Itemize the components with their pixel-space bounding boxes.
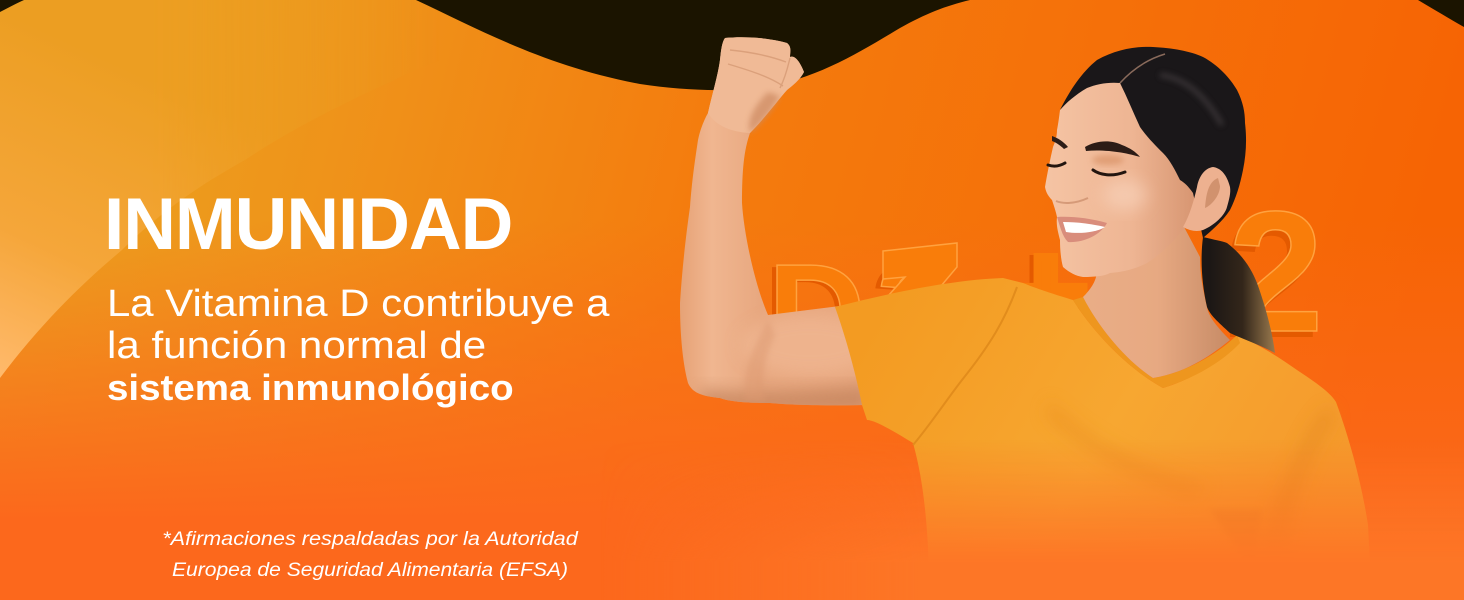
label faces: + (1002, 209, 1090, 377)
footnote: Europea de Seguridad Alimentaria (EFSA) (172, 559, 568, 581)
nose shadow (1056, 198, 1088, 203)
body text: la función normal de (107, 325, 486, 367)
footnote: *Afirmaciones respaldadas por la Autoridad (162, 528, 578, 550)
raised arm and fist (680, 37, 862, 406)
label faces: 3 (877, 238, 947, 377)
label faces (768, 176, 1324, 387)
label extrusion (763, 182, 1320, 389)
wave: dark top right corner (1418, 0, 1464, 27)
ear inner shadow (1205, 178, 1220, 208)
shirt collar (1073, 297, 1240, 388)
eyeshadow (1092, 155, 1124, 165)
fade at shirt bottom (786, 460, 1464, 600)
lips (1057, 217, 1107, 242)
body text: sistema inmunológico (107, 367, 514, 408)
footnote (162, 528, 578, 581)
heading: INMUNIDAD (104, 184, 512, 265)
face highlights (1103, 179, 1147, 211)
eyebrows (1052, 136, 1140, 157)
wave: dark top (416, 0, 970, 90)
shirt folds (1045, 400, 1210, 500)
ear (1183, 167, 1230, 231)
shirt sleeve seam (913, 287, 1017, 445)
hair parting (1120, 54, 1165, 83)
wave: dark top left corner (0, 0, 24, 12)
body text: La Vitamina D contribuye a (107, 283, 609, 325)
label faces: D (768, 236, 866, 387)
hair (1060, 47, 1246, 238)
hair shine (1160, 75, 1222, 125)
3D label: D3 + 2 behind the woman (763, 176, 1324, 389)
ponytail (1202, 237, 1275, 353)
label extrusion: 3 (871, 240, 941, 379)
body text (107, 283, 610, 408)
teeth (1063, 222, 1105, 233)
label extrusion: + (998, 211, 1086, 379)
neck (1083, 225, 1230, 378)
label faces: 2 (1228, 176, 1324, 368)
wave: upper-left golden area (0, 61, 236, 378)
head and face (1045, 47, 1246, 277)
label extrusion: 2 (1224, 182, 1320, 374)
eyelids and lashes (1048, 163, 1125, 175)
woman (600, 37, 1464, 600)
t-shirt (835, 278, 1372, 600)
label extrusion: D (763, 238, 860, 389)
